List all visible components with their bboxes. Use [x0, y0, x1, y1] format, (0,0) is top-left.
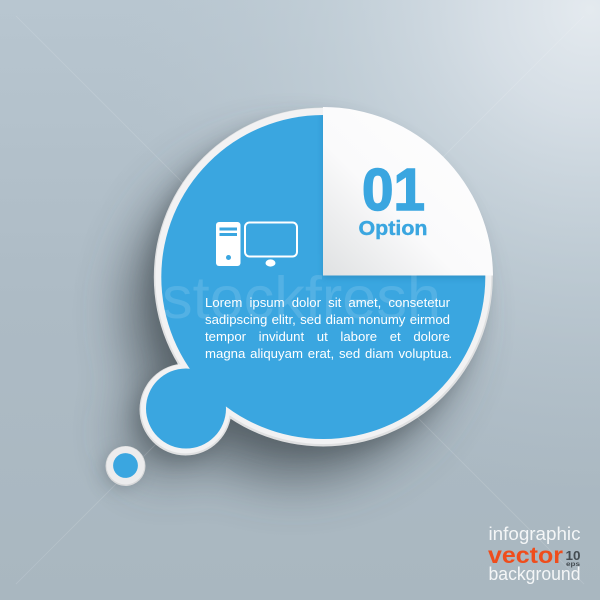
body text: sadipscing elitr, sed diam nonumy eirmod — [205, 312, 450, 327]
watermark: stockfresh — [162, 265, 441, 331]
body text: magna aliquyam erat, sed diam voluptua. — [205, 346, 452, 361]
quarter panel — [323, 107, 493, 276]
body text: tempor invidunt ut labore et dolore — [205, 329, 450, 344]
logo mark: 10: 10 — [566, 548, 580, 563]
monitor — [245, 222, 297, 267]
label Option: Option — [358, 218, 428, 240]
body text: Lorem ipsum dolor sit amet, consetetur — [205, 295, 450, 310]
logo line: infographic: infographic — [488, 524, 580, 544]
logo mark: eps: eps — [566, 562, 581, 568]
body text — [205, 295, 452, 361]
bubble outline — [140, 108, 493, 456]
bubble blue fill — [146, 115, 485, 448]
logo text — [488, 524, 581, 584]
speech bubble — [140, 107, 493, 456]
icon: desktop computer — [216, 222, 297, 267]
tower — [216, 222, 240, 266]
panel shadow — [323, 107, 493, 278]
logo line: background: background — [488, 564, 580, 584]
drop shadow — [103, 118, 484, 488]
logo line: vector: vector — [488, 542, 563, 568]
number 01: 01 — [362, 157, 425, 223]
small thought circle — [106, 446, 146, 486]
